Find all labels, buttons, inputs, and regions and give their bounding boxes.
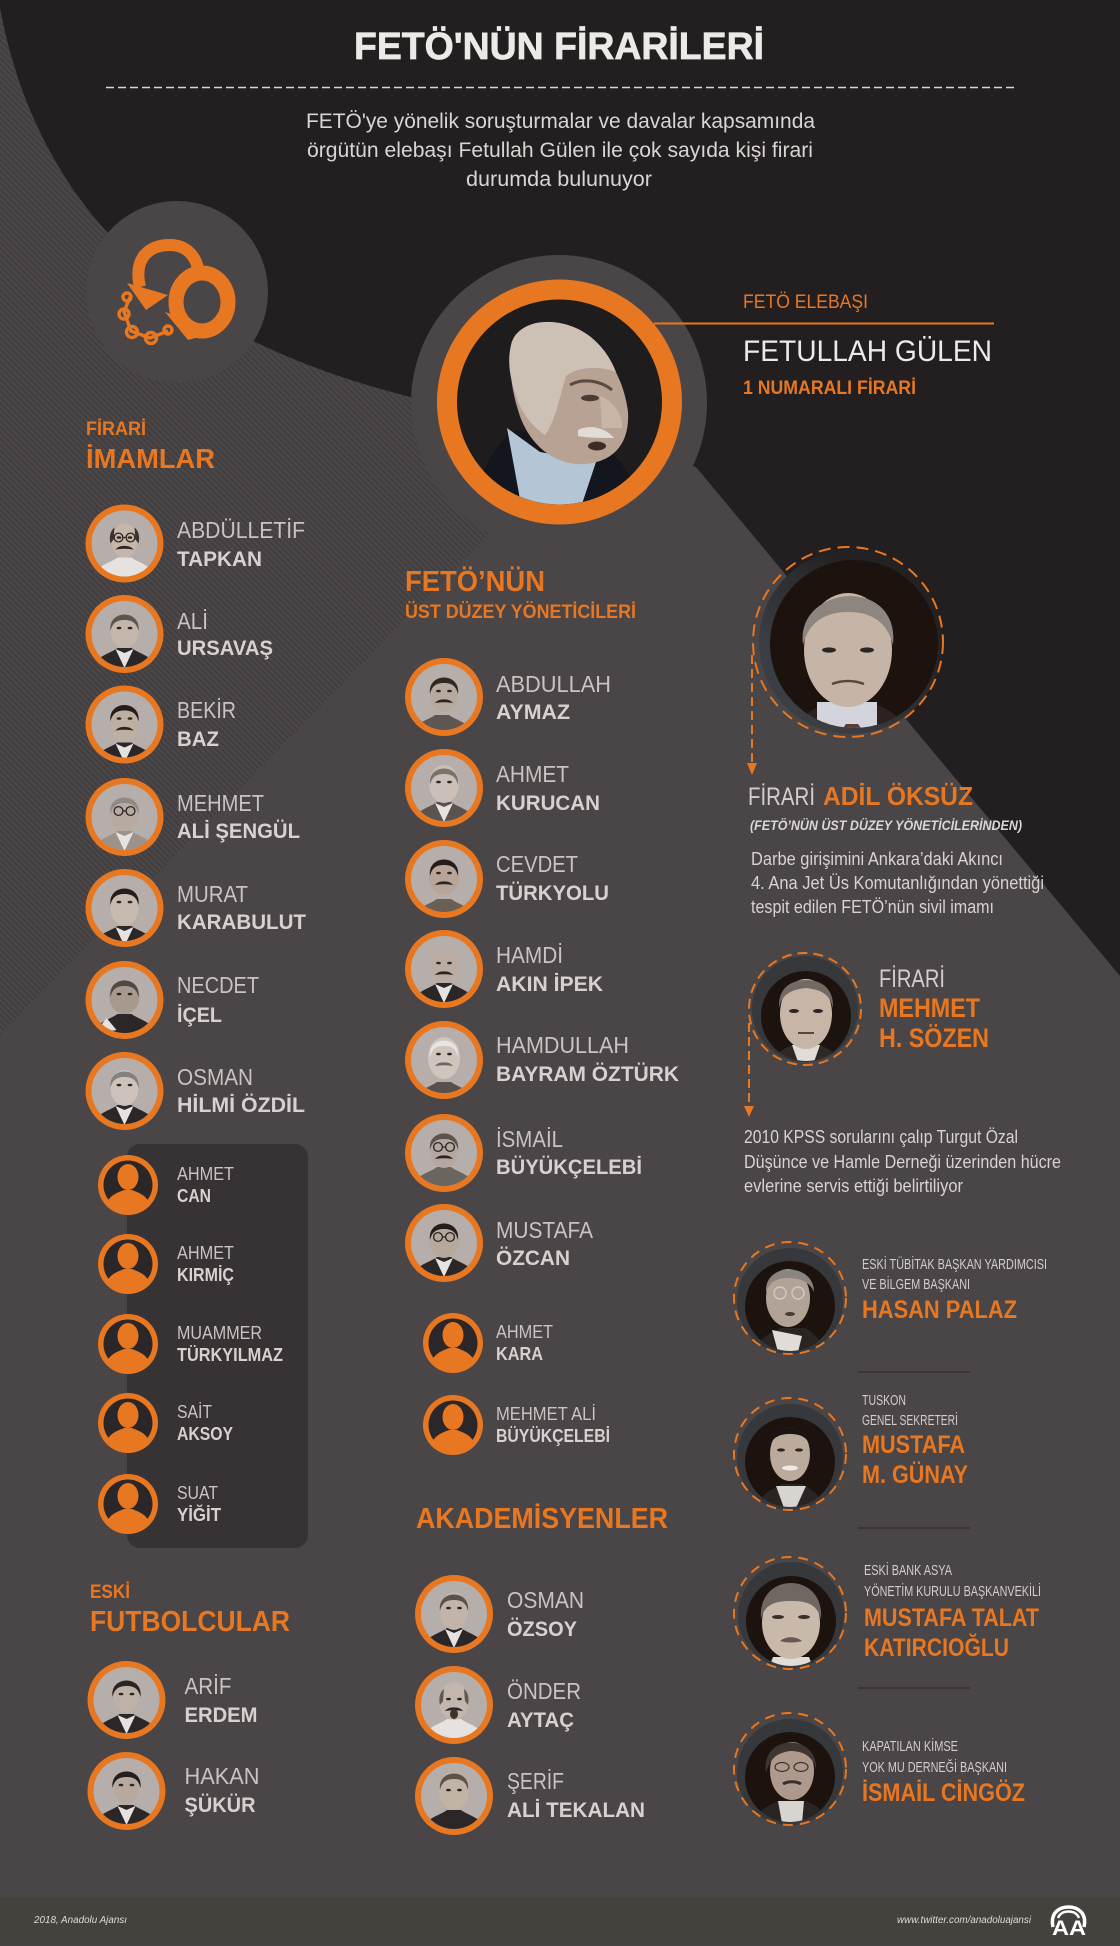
person: Mustafa M. Günay: MUSTAFA xyxy=(862,1431,965,1459)
background: striped texture xyxy=(0,8,600,1035)
text: Mehmet H. Sözen: Düşünce ve Hamle Derneği üzerinden hücre xyxy=(744,1152,1061,1172)
person: Ahmet Kurucan xyxy=(405,749,600,827)
person: Hasan Palaz: HASAN PALAZ xyxy=(862,1296,1017,1324)
panel: imams without photos xyxy=(98,1144,308,1548)
person: Cevdet Türkyolu xyxy=(405,840,609,921)
person: Necdet İçel xyxy=(86,961,259,1039)
person: Osman Hilmi Özdil xyxy=(86,1052,305,1130)
person: Mehmet Ali Büyükçelebi xyxy=(423,1395,610,1455)
person: Osman Özsoy xyxy=(415,1575,584,1653)
heading: Firari İmamlar: FİRARİ xyxy=(86,419,146,440)
footer bar xyxy=(0,1897,1120,1945)
text: Adil Öksüz: ADİL ÖKSÜZ xyxy=(823,781,973,811)
person: Osman Özsoy: ÖZSOY xyxy=(507,1618,577,1641)
person: Ahmet Can xyxy=(98,1155,234,1215)
person: Arif Erdem: ARİF xyxy=(184,1673,232,1699)
person: Hamdullah Bayram Öztürk: BAYRAM ÖZTÜRK xyxy=(496,1063,679,1086)
person: Hamdi Akın İpek: AKIN İPEK xyxy=(496,973,603,996)
person: Mustafa Talat Katırcıoğlu xyxy=(734,1557,1041,1669)
title: FETÖ'NÜN FİRARİLERİ xyxy=(354,25,764,68)
person: Mustafa Talat Katırcıoğlu: KATIRCIOĞLU xyxy=(864,1633,1009,1662)
person: Hamdullah Bayram Öztürk xyxy=(405,1021,679,1104)
person: Bekir Baz: BAZ xyxy=(177,728,219,751)
person: Önder Aytaç: ÖNDER xyxy=(507,1678,581,1704)
subtitle: durumda bulunuyor xyxy=(466,168,652,191)
person: Cevdet Türkyolu: CEVDET xyxy=(496,851,578,877)
person: Ali Ursavaş: ALİ xyxy=(177,608,208,634)
person: Murat Karabulut xyxy=(86,869,306,948)
person: İsmail Cingöz: İSMAİL CİNGÖZ xyxy=(862,1778,1025,1807)
icon: AA logo xyxy=(1052,1907,1086,1940)
person: Mustafa Talat Katırcıoğlu: YÖNETİM KURULU BAŞKANVEKİLİ xyxy=(864,1582,1041,1600)
person: Önder Aytaç xyxy=(415,1666,581,1744)
person: Ahmet Kırmiç: AHMET xyxy=(177,1242,234,1263)
Gülen caption: FETULLAH GÜLEN xyxy=(743,335,992,368)
text: Adil Öksüz: 4. Ana Jet Üs Komutanlığından yönettiği xyxy=(751,873,1044,893)
person: Ahmet Kara: AHMET xyxy=(496,1321,553,1342)
person: Hakan Şükür xyxy=(88,1752,260,1830)
person: Suat Yiğit: YİĞİT xyxy=(177,1504,221,1525)
person: Şerif Ali Tekalan: ŞERİF xyxy=(507,1768,564,1794)
subtitle: FETÖ'ye yönelik soruşturmalar ve davalar kapsamında xyxy=(306,110,815,133)
person: Hakan Şükür: HAKAN xyxy=(184,1763,260,1789)
person: Ahmet Can: AHMET xyxy=(177,1163,234,1184)
person: Hamdi Akın İpek: HAMDİ xyxy=(496,942,563,968)
person: İsmail Cingöz xyxy=(734,1713,1025,1825)
heading: Akademisyenler: AKADEMİSYENLER xyxy=(416,1503,668,1535)
person: Necdet İçel: İÇEL xyxy=(177,1004,222,1027)
person: Suat Yiğit: SUAT xyxy=(177,1482,218,1503)
text: Mehmet H. Sözen: evlerine servis ettiği belirtiliyor xyxy=(744,1176,963,1196)
heading: Eski Futbolcular: ESKİ xyxy=(90,1582,130,1603)
heading: Firari İmamlar: İMAMLAR xyxy=(86,443,215,474)
person: Hasan Palaz xyxy=(734,1242,1047,1354)
Gülen caption: 1 NUMARALI FİRARİ xyxy=(743,378,916,399)
person: Abdullah Aymaz: AYMAZ xyxy=(496,701,570,724)
arrow: Öksüz dashed arrow xyxy=(747,655,757,775)
person: İsmail Cingöz: KAPATILAN KİMSE xyxy=(862,1737,958,1755)
text: Mehmet H. Sözen: FİRARİ xyxy=(879,964,945,993)
arrow: Sözen dashed arrow xyxy=(744,1023,754,1117)
person: Osman Hilmi Özdil: OSMAN xyxy=(177,1064,253,1090)
person: İsmail Büyükçelebi xyxy=(405,1114,642,1192)
heading: Eski Futbolcular xyxy=(90,1582,290,1638)
heading: FETÖ'nün üst düzey yöneticileri xyxy=(405,565,636,623)
person: Önder Aytaç: AYTAÇ xyxy=(507,1709,574,1732)
person: Mehmet Ali Büyükçelebi: BÜYÜKÇELEBİ xyxy=(496,1426,610,1446)
text: Adil Öksüz xyxy=(748,781,1044,917)
person: Ahmet Kurucan: KURUCAN xyxy=(496,792,600,815)
person: Sait Aksoy: SAİT xyxy=(177,1401,212,1422)
person: Mustafa Talat Katırcıoğlu: ESKİ BANK ASYA xyxy=(864,1561,952,1579)
footer credit: 2018, Anadolu Ajansı xyxy=(33,1915,127,1926)
person: Osman Özsoy: OSMAN xyxy=(507,1587,584,1613)
person: İsmail Büyükçelebi: İSMAİL xyxy=(496,1126,563,1152)
person: Ali Ursavaş: URSAVAŞ xyxy=(177,637,273,660)
person: Hamdullah Bayram Öztürk: HAMDULLAH xyxy=(496,1032,629,1058)
text: Adil Öksüz: tespit edilen FETÖ’nün sivil imamı xyxy=(751,897,994,917)
person: Arif Erdem: ERDEM xyxy=(184,1704,258,1727)
person: Mustafa M. Günay: M. GÜNAY xyxy=(862,1460,968,1489)
person: Ahmet Kırmiç: KIRMİÇ xyxy=(177,1265,234,1285)
person: Mustafa M. Günay: GENEL SEKRETERİ xyxy=(862,1411,958,1429)
person: Şerif Ali Tekalan: ALİ TEKALAN xyxy=(507,1799,645,1822)
person: Mehmet Ali Büyükçelebi: MEHMET ALİ xyxy=(496,1403,596,1424)
person: Mustafa Özcan: MUSTAFA xyxy=(496,1217,594,1243)
person: Abdülletif Tapkan xyxy=(86,504,305,582)
Gülen caption: FETÖ ELEBAŞI xyxy=(743,292,868,313)
heading: FETÖ'nün üst düzey yöneticileri: ÜST DÜZEY YÖNETİCİLERİ xyxy=(405,602,636,623)
person: Abdülletif Tapkan: ABDÜLLETİF xyxy=(177,517,305,543)
person: Ahmet Kırmiç xyxy=(98,1234,234,1294)
footer url: www.twitter.com/anadoluajansi xyxy=(897,1915,1032,1926)
person: Necdet İçel: NECDET xyxy=(177,972,259,998)
person: Ahmet Kara: KARA xyxy=(496,1344,543,1364)
person: Mustafa Özcan xyxy=(405,1204,594,1282)
person: Murat Karabulut: MURAT xyxy=(177,881,248,907)
portrait: Fetullah Gülen xyxy=(411,255,707,551)
person: Mustafa Talat Katırcıoğlu: MUSTAFA TALAT xyxy=(864,1604,1039,1632)
Gülen caption xyxy=(654,292,994,399)
person: Muammer Türkyılmaz: MUAMMER xyxy=(177,1322,262,1343)
portrait: Mehmet H. Sözen xyxy=(749,953,861,1065)
text: Mehmet H. Sözen: H. SÖZEN xyxy=(879,1023,989,1053)
person: Hamdi Akın İpek xyxy=(405,930,603,1008)
person: Ahmet Kurucan: AHMET xyxy=(496,761,569,787)
person: Hasan Palaz: VE BİLGEM BAŞKANI xyxy=(862,1275,970,1293)
text: Mehmet H. Sözen xyxy=(744,964,1061,1196)
heading: Firari İmamlar xyxy=(86,419,215,474)
person: Murat Karabulut: KARABULUT xyxy=(177,911,306,934)
heading: FETÖ'nün üst düzey yöneticileri: FETÖ’NÜN xyxy=(405,565,545,598)
portrait: Adil Öksüz xyxy=(753,547,943,737)
person: Hasan Palaz: ESKİ TÜBİTAK BAŞKAN YARDIMCISI xyxy=(862,1255,1047,1273)
person: Abdullah Aymaz xyxy=(405,658,611,737)
person: Hakan Şükür: ŞÜKÜR xyxy=(184,1794,256,1817)
person: Arif Erdem xyxy=(88,1661,258,1739)
person: Mustafa M. Günay xyxy=(734,1392,968,1510)
person: Mehmet Ali Şengül: MEHMET xyxy=(177,790,264,816)
person: Mehmet Ali Şengül xyxy=(86,778,300,856)
person: İsmail Cingöz: YOK MU DERNEĞİ BAŞKANI xyxy=(862,1758,1007,1776)
person: Sait Aksoy: AKSOY xyxy=(177,1424,233,1444)
person: Cevdet Türkyolu: TÜRKYOLU xyxy=(496,882,609,905)
person: Muammer Türkyılmaz: TÜRKYILMAZ xyxy=(177,1345,283,1365)
person: Ali Ursavaş xyxy=(86,595,273,673)
icon: handcuffs in circle xyxy=(86,201,268,383)
person: Mustafa M. Günay: TUSKON xyxy=(862,1392,906,1409)
subtitle: örgütün elebaşı Fetullah Gülen ile çok sayıda kişi firari xyxy=(307,139,813,162)
text: Adil Öksüz: FİRARİ xyxy=(748,782,815,811)
person: Bekir Baz xyxy=(86,686,236,764)
person: Şerif Ali Tekalan xyxy=(415,1757,645,1835)
text: Adil Öksüz: Darbe girişimini Ankara’daki Akıncı xyxy=(751,849,1003,869)
person: Bekir Baz: BEKİR xyxy=(177,697,236,723)
person: Abdullah Aymaz: ABDULLAH xyxy=(496,671,611,697)
person: Abdülletif Tapkan: TAPKAN xyxy=(177,548,262,571)
person: Osman Hilmi Özdil: HİLMİ ÖZDİL xyxy=(177,1094,305,1117)
person: Mehmet Ali Şengül: ALİ ŞENGÜL xyxy=(177,820,300,843)
person: Mustafa Özcan: ÖZCAN xyxy=(496,1247,570,1270)
person: Sait Aksoy xyxy=(98,1393,233,1453)
heading: Eski Futbolcular: FUTBOLCULAR xyxy=(90,1606,290,1638)
person: Ahmet Kara xyxy=(423,1313,553,1373)
text: Mehmet H. Sözen: MEHMET xyxy=(879,993,980,1023)
person: Muammer Türkyılmaz xyxy=(98,1314,283,1374)
person: Ahmet Can: CAN xyxy=(177,1186,211,1206)
text: Mehmet H. Sözen: 2010 KPSS sorularını çalıp Turgut Özal xyxy=(744,1127,1018,1147)
subtitle xyxy=(306,110,815,191)
person: İsmail Büyükçelebi: BÜYÜKÇELEBİ xyxy=(496,1156,642,1179)
person: Suat Yiğit xyxy=(98,1474,221,1534)
icon: AA logo: AA xyxy=(1052,1917,1086,1940)
text: Adil Öksüz: (FETÖ’NÜN ÜST DÜZEY YÖNETİCİLERİNDEN) xyxy=(750,817,1022,833)
